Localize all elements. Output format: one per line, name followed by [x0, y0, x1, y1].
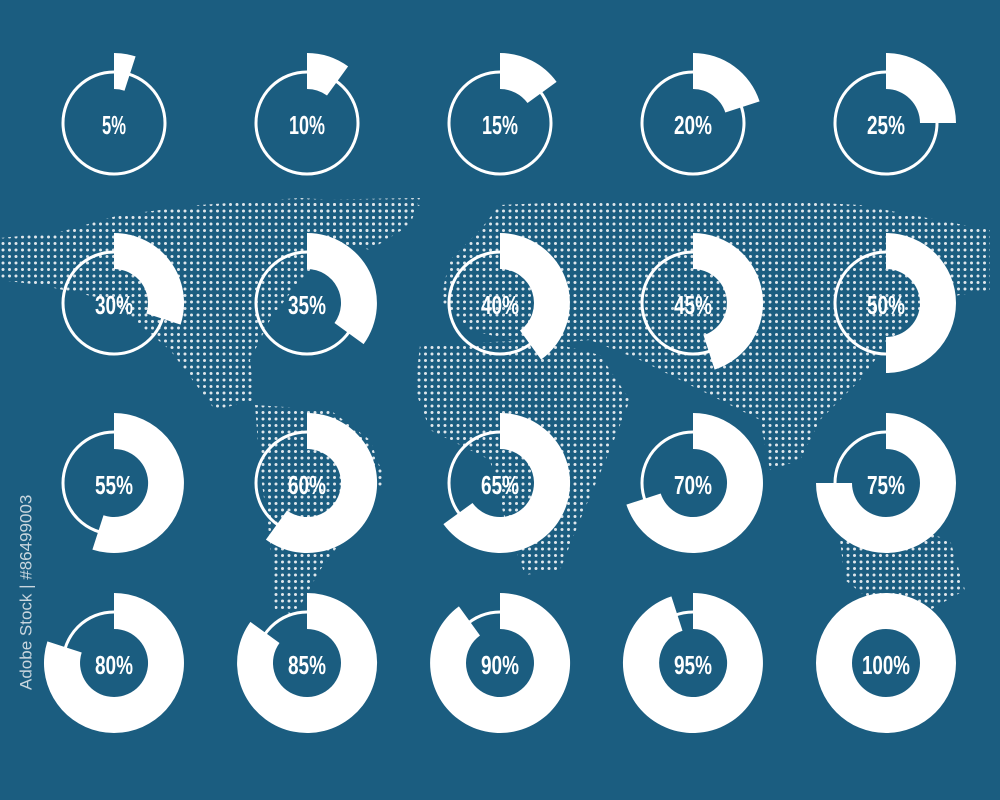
chart: 5%: 5% — [102, 110, 126, 140]
dotted world map — [0, 198, 990, 615]
chart: 90%: 90% — [481, 650, 519, 680]
chart: 55% — [63, 413, 184, 553]
chart: 55%: 55% — [95, 470, 133, 500]
chart: 90% — [430, 593, 570, 733]
chart: 40% — [449, 233, 570, 360]
chart: 70%: 70% — [674, 470, 712, 500]
watermark id: Adobe Stock | #86499003 — [16, 495, 36, 690]
chart: 100% — [816, 593, 956, 733]
chart: 60%: 60% — [288, 470, 326, 500]
chart: 65% — [443, 413, 570, 553]
chart: 35%: 35% — [288, 290, 326, 320]
chart: 30%: 30% — [95, 290, 133, 320]
chart: 25% — [835, 53, 956, 174]
chart: 15%: 15% — [482, 110, 518, 140]
chart: 95% — [623, 593, 763, 733]
chart: 25%: 25% — [867, 110, 905, 140]
chart: 10%: 10% — [289, 110, 325, 140]
chart: 15% — [449, 53, 557, 174]
chart: 80% — [44, 593, 184, 733]
charts grid — [44, 53, 956, 733]
chart: 75%: 75% — [867, 470, 905, 500]
chart: 20% — [642, 53, 760, 174]
chart: 60% — [256, 413, 377, 553]
chart: 95%: 95% — [674, 650, 712, 680]
chart: 50% — [835, 233, 956, 373]
chart: 10% — [256, 53, 358, 174]
chart: 65%: 65% — [481, 470, 519, 500]
chart: 85%: 85% — [288, 650, 326, 680]
chart: 80%: 80% — [95, 650, 133, 680]
chart: 100%: 100% — [862, 650, 910, 680]
chart: 50%: 50% — [867, 290, 905, 320]
chart: 30% — [63, 233, 184, 354]
chart: 5% — [63, 53, 165, 174]
chart: 35% — [256, 233, 377, 354]
chart: 20%: 20% — [674, 110, 712, 140]
chart: 45%: 45% — [674, 290, 712, 320]
chart: 45% — [642, 233, 763, 370]
chart: 75% — [816, 413, 956, 553]
chart: 85% — [237, 593, 377, 733]
chart: 70% — [626, 413, 763, 553]
chart: 40%: 40% — [481, 290, 519, 320]
